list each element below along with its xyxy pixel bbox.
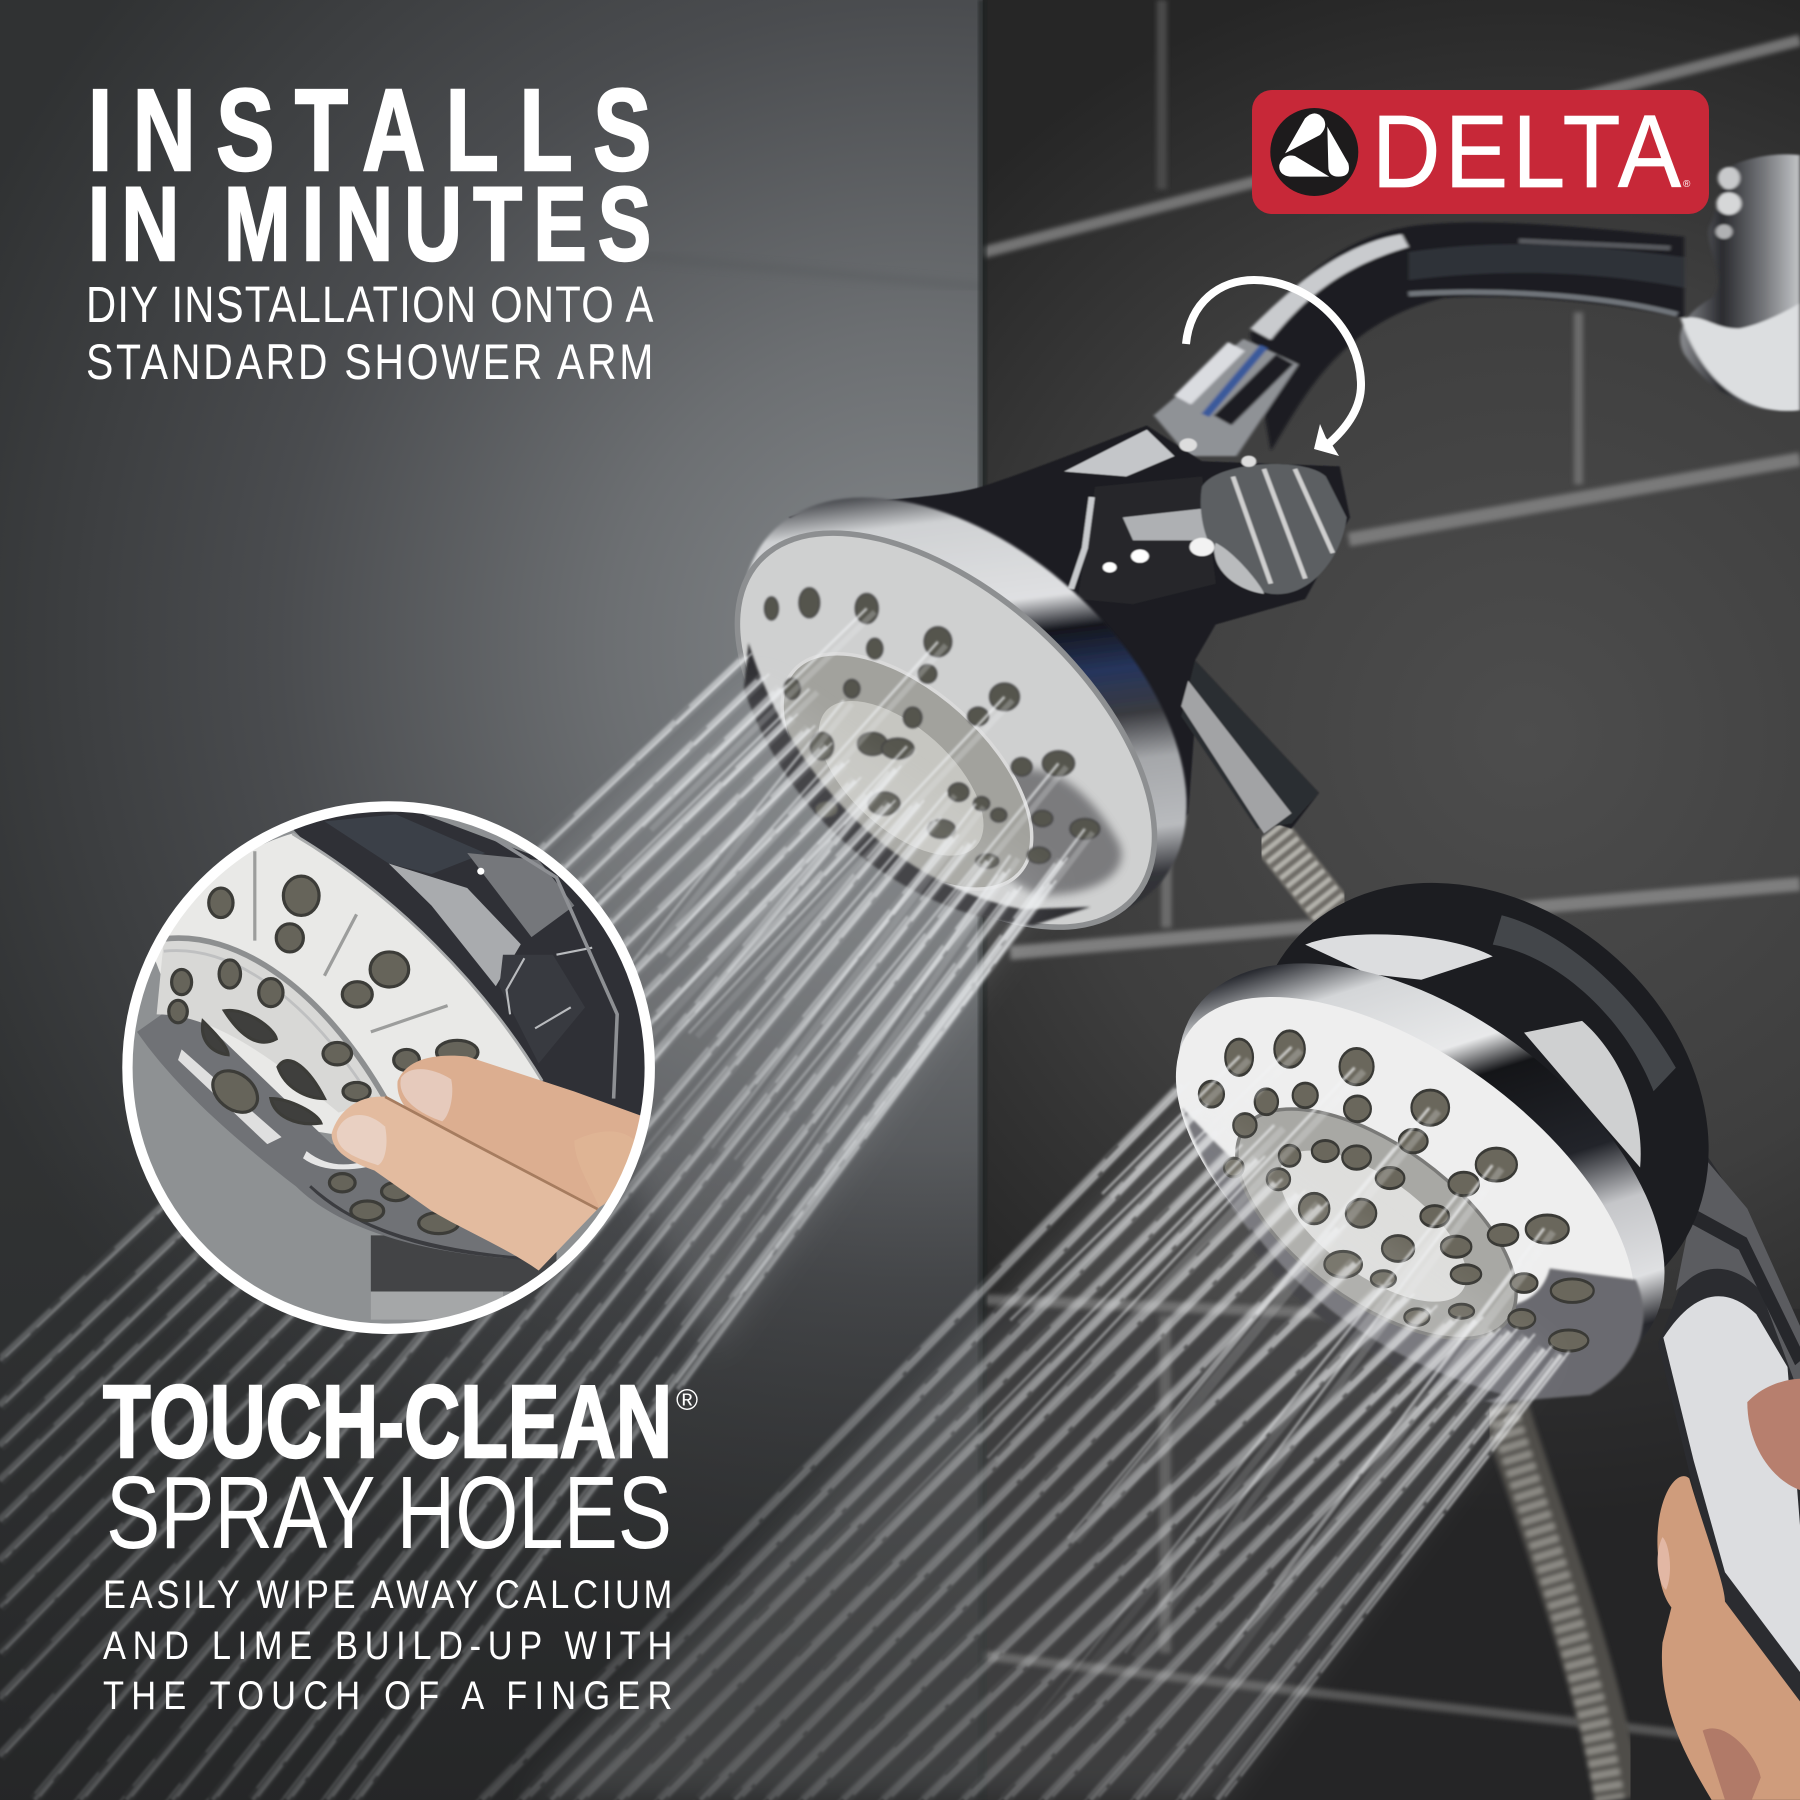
rotation arrow <box>1186 280 1361 456</box>
heading: touch-clean spray holes: TOUCH-CLEAN <box>103 1364 672 1479</box>
spray face <box>734 530 1158 930</box>
right tiled wall <box>978 0 1800 1800</box>
lower chrome skirt <box>1182 1108 1643 1403</box>
spray holes upper <box>765 588 1100 868</box>
left wall <box>0 0 987 1800</box>
body text: touch-clean description: AND LIME BUILD-UP WITH <box>103 1623 672 1668</box>
lower hose <box>1502 1406 1619 1800</box>
heading: touch-clean spray holes <box>103 1364 698 1570</box>
body text: touch-clean description: EASILY WIPE AWAY CALCIUM <box>103 1572 672 1617</box>
heading: installs in minutes: IN MINUTES <box>88 165 651 283</box>
dome back <box>1165 792 1797 1412</box>
inset circle: touch-clean close-up <box>115 792 666 1343</box>
lower shower head <box>1103 792 1800 1800</box>
inset spray holes <box>169 876 478 1234</box>
brand wordmark: DELTA <box>1372 93 1681 209</box>
chrome rim <box>1103 879 1739 1462</box>
heading: touch-clean spray holes: SPRAY HOLES <box>106 1455 672 1570</box>
logo mark <box>1270 108 1358 196</box>
registered mark: ® <box>1683 179 1691 190</box>
upper shower head <box>734 425 1351 930</box>
inner chrome ring <box>1199 1065 1554 1383</box>
heading: installs in minutes: INSTALLS <box>88 65 651 195</box>
inset inner ring <box>157 938 385 1113</box>
shower arm and wall flange <box>1154 154 1800 456</box>
head back and holder <box>789 426 1350 864</box>
inner chrome ring <box>780 652 1034 890</box>
Delta logo badge <box>1252 90 1709 214</box>
subheading: DIY installation: DIY INSTALLATION ONTO A <box>86 276 653 333</box>
subheading: DIY installation <box>86 276 653 390</box>
handle <box>1658 1150 1800 1800</box>
inset fingers <box>332 1056 642 1270</box>
inset chrome underside <box>137 1000 539 1260</box>
chrome rim <box>746 496 1188 908</box>
inset white face <box>153 834 542 1144</box>
body text: touch-clean description: THE TOUCH OF A FINGER <box>103 1673 672 1718</box>
inset chrome side band <box>289 804 653 1123</box>
spray face <box>1111 923 1699 1451</box>
upper water spray <box>0 608 1093 1800</box>
upper hose <box>1269 832 1337 918</box>
body text: touch-clean description <box>103 1572 672 1718</box>
hand holding handle <box>1657 1379 1800 1800</box>
subheading: DIY installation: STANDARD SHOWER ARM <box>86 334 653 390</box>
lower water spray <box>474 1047 1569 1800</box>
inset tile backdrop <box>371 1235 556 1292</box>
spray holes lower <box>1199 1031 1594 1351</box>
heading: installs in minutes <box>88 65 651 283</box>
heading: touch-clean spray holes: ® <box>676 1384 698 1417</box>
